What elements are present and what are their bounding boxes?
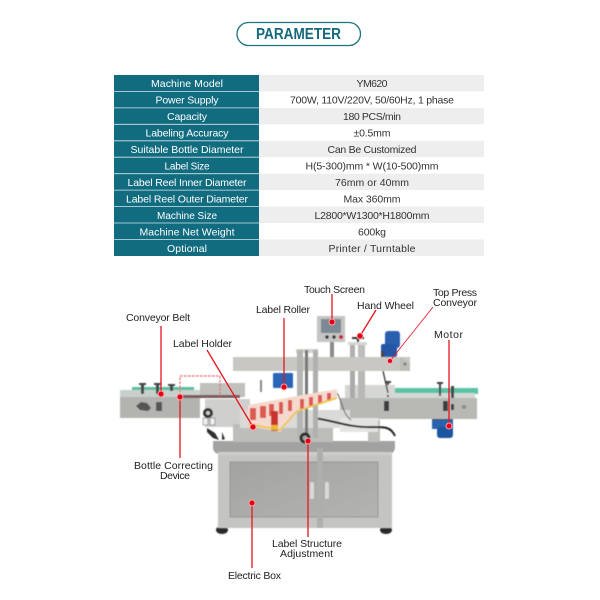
callout: Label Structure Adjustment: Label Structure bbox=[272, 538, 342, 550]
row: Label Reel Outer Diameter: Label Reel Outer Diameter bbox=[126, 194, 248, 206]
vertical posts bbox=[296, 349, 318, 438]
top beam bbox=[233, 357, 410, 398]
top motor bbox=[381, 331, 400, 357]
dashed bottle-correcting outline bbox=[180, 376, 220, 397]
labeled bottles band bbox=[248, 389, 337, 432]
row: Suitable Bottle Diameter: Can Be Customized bbox=[328, 144, 417, 156]
row: Label Size bbox=[164, 160, 439, 172]
row: Optional bbox=[167, 243, 416, 255]
callout: Electric Box: Electric Box bbox=[228, 570, 282, 582]
callout: Hand Wheel: Hand Wheel bbox=[357, 300, 414, 312]
callout: Bottle Correcting Device bbox=[134, 394, 213, 482]
hand wheel column bbox=[348, 337, 367, 357]
row: Machine Net Weight: 600kg bbox=[358, 226, 386, 238]
callout: Hand Wheel bbox=[357, 300, 414, 339]
row: Labeling Accuracy: Labeling Accuracy bbox=[146, 128, 229, 140]
row: Capacity bbox=[167, 111, 401, 123]
row: Power Supply: Power Supply bbox=[156, 94, 219, 106]
row: Capacity: 180 PCS/min bbox=[343, 111, 401, 123]
callout: Top Press Conveyor: Conveyor bbox=[433, 297, 478, 309]
callout: Label Structure Adjustment bbox=[272, 438, 342, 560]
row: Machine Model bbox=[151, 78, 388, 90]
callout: Bottle Correcting Device: Bottle Correcting bbox=[134, 460, 213, 472]
labeling mechanism bbox=[203, 373, 395, 442]
cabinet base bbox=[213, 441, 395, 534]
parameter table bbox=[114, 75, 484, 256]
row: Label Reel Outer Diameter: Max 360mm bbox=[344, 194, 401, 206]
row: Suitable Bottle Diameter: Suitable Bottle Diameter bbox=[130, 144, 244, 156]
right conveyor bbox=[340, 381, 478, 419]
callout: Touch Screen bbox=[304, 284, 365, 325]
title: PARAMETER pill bbox=[237, 22, 360, 46]
callout: Conveyor Belt bbox=[126, 312, 190, 397]
row: Machine Model: YM620 bbox=[356, 78, 388, 90]
callout: Label Roller: Label Roller bbox=[256, 304, 310, 316]
row: Optional: Printer / Turntable bbox=[328, 243, 416, 255]
row: Machine Net Weight bbox=[140, 226, 386, 238]
row: Labeling Accuracy bbox=[146, 128, 391, 140]
row: Power Supply: 700W, 110V/220V, 50/60Hz, 1 phase bbox=[290, 94, 454, 106]
row: Machine Size: Machine Size bbox=[157, 211, 217, 222]
lower motor bbox=[432, 417, 453, 438]
row: Power Supply bbox=[156, 94, 454, 106]
callout: Conveyor Belt: Conveyor Belt bbox=[126, 312, 190, 324]
callout: Top Press Conveyor: Top Press bbox=[433, 287, 477, 299]
row: Label Reel Inner Diameter: 76mm or 40mm bbox=[335, 177, 409, 189]
left conveyor bbox=[120, 383, 245, 418]
icon: label adjustment knob bbox=[300, 432, 310, 444]
callout: Bottle Correcting Device: Device bbox=[160, 470, 190, 482]
row: Label Reel Outer Diameter bbox=[126, 194, 401, 206]
callout: Motor bbox=[434, 329, 464, 429]
callout: Label Roller bbox=[256, 304, 310, 390]
row: Label Reel Inner Diameter: Label Reel Inner Diameter bbox=[128, 177, 247, 189]
callout: Label Holder: Label Holder bbox=[173, 338, 232, 350]
row: Machine Net Weight: Machine Net Weight bbox=[140, 226, 235, 238]
callout: Top Press Conveyor bbox=[388, 287, 478, 364]
row: Label Reel Inner Diameter bbox=[128, 177, 409, 189]
row: Capacity: Capacity bbox=[167, 111, 208, 123]
row: Machine Size bbox=[157, 210, 430, 222]
row: Labeling Accuracy: ±0.5mm bbox=[354, 128, 391, 140]
callout: Electric Box bbox=[228, 500, 282, 582]
touch screen control box bbox=[317, 316, 345, 357]
row: Label Size: Label Size bbox=[164, 162, 210, 172]
callout: Motor: Motor bbox=[434, 329, 464, 341]
callout: Touch Screen: Touch Screen bbox=[304, 284, 365, 296]
title: PARAMETER pill: PARAMETER bbox=[256, 26, 341, 43]
callout: Label Holder bbox=[173, 338, 256, 430]
machine illustration bbox=[120, 316, 478, 534]
row: Optional: Optional bbox=[167, 243, 207, 255]
row: Machine Model: Machine Model bbox=[151, 78, 223, 90]
row: Machine Size: L2800*W1300*H1800mm bbox=[314, 210, 430, 222]
row: Suitable Bottle Diameter bbox=[130, 144, 417, 156]
row: Label Size: H(5-300)mm * W(10-500)mm bbox=[306, 160, 439, 172]
callout: Label Structure Adjustment: Adjustment bbox=[280, 548, 333, 560]
